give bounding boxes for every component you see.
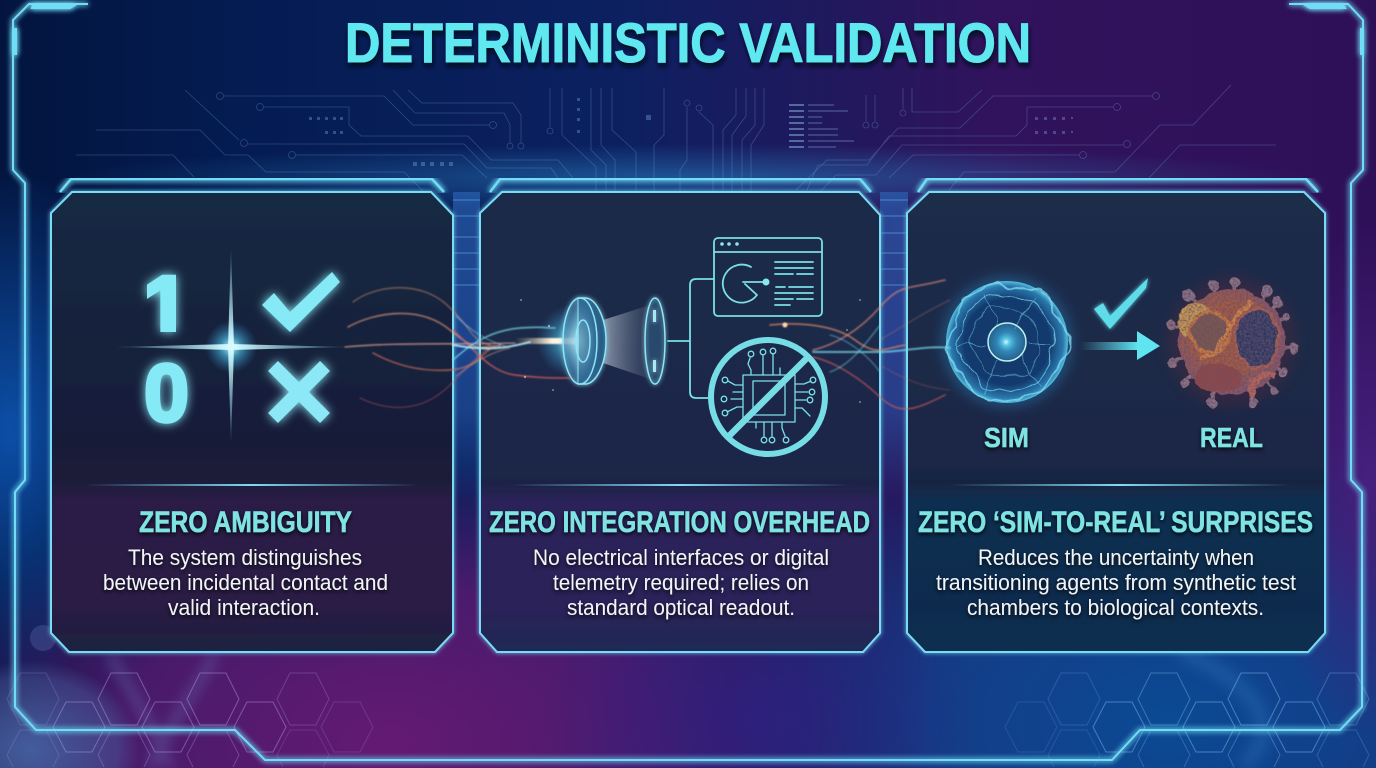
- panel 1 top bar: [60, 179, 444, 192]
- panel 1 heading: ZERO AMBIGUITY: [139, 506, 352, 539]
- icon: biological cell: [1168, 278, 1296, 406]
- icon: digit zero: 0: [144, 348, 189, 439]
- panel connectors: [453, 192, 908, 502]
- icon: transition arrow: [1080, 331, 1160, 360]
- icon: simulated cell: [941, 276, 1073, 408]
- panel 2 body text: telemetry required; relies on: [553, 570, 809, 595]
- icon: check mark: [262, 272, 340, 332]
- panel 3 body text: chambers to biological contexts.: [967, 595, 1264, 620]
- icon: binary check and cross: [115, 248, 348, 443]
- panel: zero integration overhead: [480, 179, 880, 652]
- panel 1 frame: [51, 192, 453, 652]
- panel 2 heading: ZERO INTEGRATION OVERHEAD: [489, 506, 870, 539]
- light streams: right: [770, 280, 950, 409]
- light flare: [536, 305, 608, 377]
- second lens: [645, 298, 665, 384]
- icon: validated check: [1094, 278, 1148, 329]
- panel 2 body text: [533, 545, 829, 620]
- icon: digit one: 1: [139, 255, 194, 365]
- spark particles: [520, 299, 861, 403]
- panel 1 divider: [84, 484, 420, 486]
- DNA backdrop: right: [1180, 652, 1264, 768]
- label: sim: SIM: [984, 422, 1029, 453]
- panel 1 body text: valid interaction.: [168, 595, 320, 620]
- connector lines: [668, 279, 714, 398]
- hexagon pattern: bottom right: [1005, 673, 1369, 767]
- beam cone: [603, 305, 650, 379]
- panel: zero ambiguity: [51, 179, 453, 652]
- panel 1 body text: [103, 545, 388, 620]
- panel 3 divider: [950, 484, 1290, 486]
- panel 2 top bar: [490, 179, 871, 192]
- panel 2 body text: standard optical readout.: [567, 595, 795, 620]
- panel 3 top bar: [918, 179, 1318, 192]
- panel 3 frame: [907, 192, 1325, 652]
- icon: sim-to-real diagram: [941, 276, 1296, 453]
- hexagon pattern: bottom left: [7, 673, 373, 767]
- icon: star flare: [115, 248, 348, 443]
- title: DETERMINISTIC VALIDATION: [345, 11, 1031, 74]
- icon: crossed-out chip: [711, 340, 825, 454]
- panel 2 divider: [510, 484, 850, 486]
- icon: dashboard window: [714, 238, 822, 316]
- panel 3 body text: Reduces the uncertainty when: [978, 545, 1254, 570]
- circuit traces: [76, 85, 1276, 192]
- panel 2 frame: [480, 192, 880, 652]
- icon: cross: [273, 366, 325, 418]
- panel 3 body text: transitioning agents from synthetic test: [936, 570, 1296, 595]
- panel: zero sim-to-real surprises: [907, 179, 1325, 652]
- panel 1 body text: The system distinguishes: [128, 545, 362, 570]
- panel 3 body text: [936, 545, 1296, 620]
- molecule and DNA backdrop: left: [0, 625, 215, 768]
- panel 2 body text: No electrical interfaces or digital: [533, 545, 829, 570]
- light streams: left: [345, 288, 570, 407]
- icon: optical lens system: [515, 238, 825, 454]
- incoming ray: [515, 338, 577, 344]
- panel 1 body text: between incidental contact and: [103, 570, 388, 595]
- first lens: [563, 298, 606, 384]
- label: real: REAL: [1200, 422, 1263, 453]
